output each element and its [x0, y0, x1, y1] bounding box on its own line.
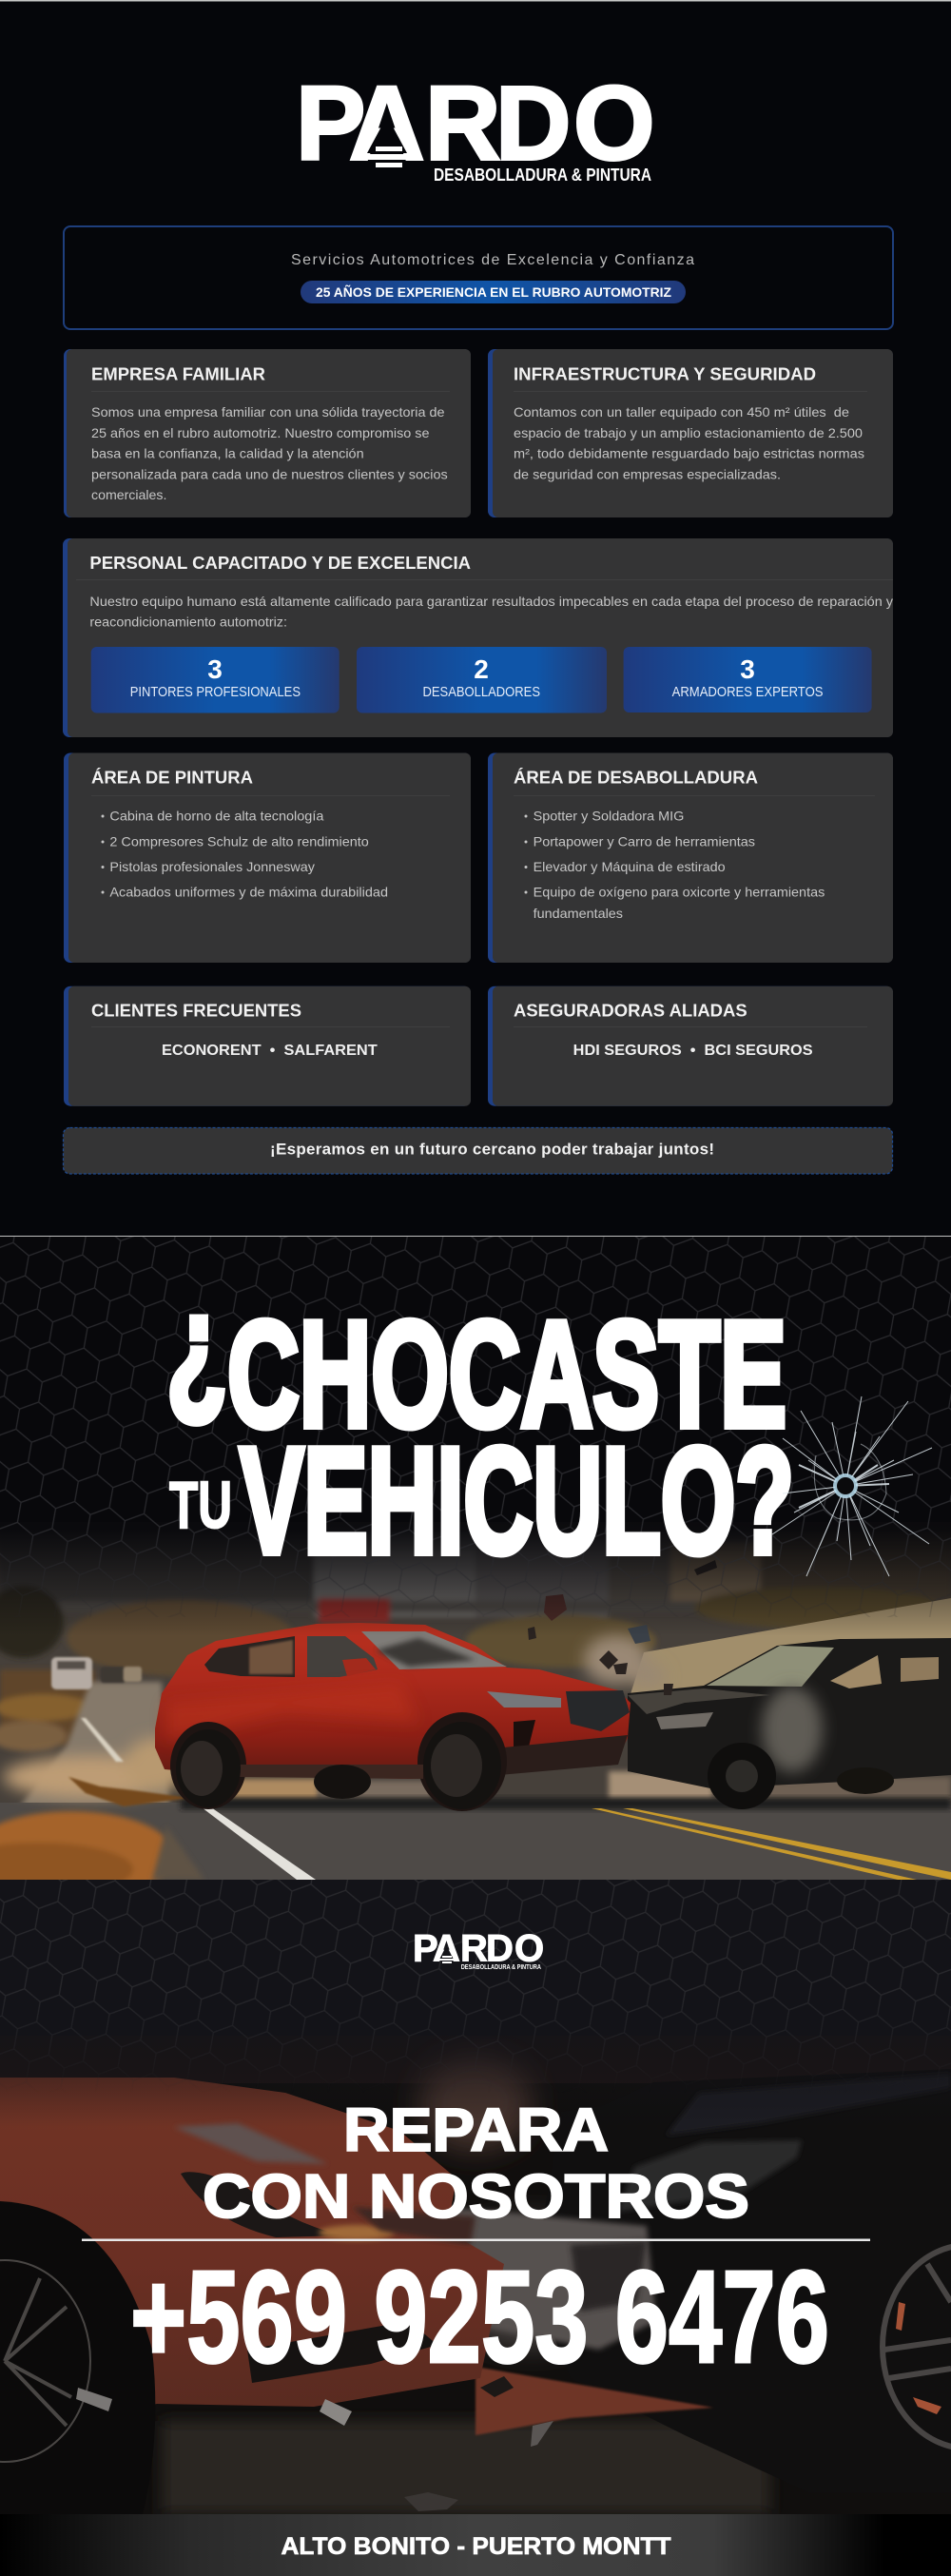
- body text: m², todo debidamente resguardado bajo estrictas normas: [514, 445, 864, 460]
- yellow lines: [592, 1808, 917, 1880]
- panel: aseguradoras aliadas: [488, 986, 893, 1106]
- heading: repara con nosotros: REPARA: [343, 2096, 609, 2164]
- headline: chocaste tu vehiculo: TU: [169, 1468, 232, 1542]
- headline: chocaste tu vehiculo: ¿: [166, 1262, 227, 1430]
- black car: [628, 1638, 951, 1809]
- footer band: location: ALTO BONITO - PUERTO MONTT: [281, 2533, 671, 2560]
- section: repair call to action: [0, 1880, 951, 2576]
- badge: 25 years: 25 AÑOS DE EXPERIENCIA EN EL RUBRO AUTOMOTRIZ: [316, 285, 671, 300]
- stat: pintores: 3: [207, 654, 223, 684]
- panel: closing message: ¡Esperamos en un futuro cercano poder trabajar juntos!: [270, 1140, 714, 1159]
- stat: armadores: 3: [740, 654, 755, 684]
- logo: small PARDO: PARDO: [413, 1927, 544, 1969]
- stat: pintores: PINTORES PROFESIONALES: [130, 684, 301, 700]
- body text: personalizada para cada uno de nuestros clientes y socios: [91, 466, 448, 481]
- body text: Somos una empresa familiar con una sólida trayectoria de: [91, 404, 445, 420]
- panel: area de desabolladura: [488, 753, 893, 963]
- panel: clientes frecuentes: [64, 986, 471, 1106]
- debris: [528, 1560, 717, 1695]
- panel: empresa familiar: [64, 349, 471, 517]
- grille: [566, 1690, 630, 1731]
- top fade: [0, 1484, 951, 1636]
- hexagon texture: [0, 1237, 951, 1617]
- headline: chocaste tu vehiculo: [166, 1262, 794, 1585]
- heading: ÁREA DE PINTURA: [91, 767, 253, 787]
- headlight: [181, 2172, 342, 2237]
- wheels: [314, 1765, 371, 1799]
- hexagon texture: [0, 1880, 951, 2055]
- body text: 25 años en el rubro automotriz. Nuestro compromiso se: [91, 425, 430, 440]
- equipment list: Acabados uniformes y de máxima durabilidad: [109, 885, 388, 900]
- body text: de seguridad con empresas especializadas.: [514, 466, 781, 481]
- photo: collision on road: [0, 1522, 951, 1899]
- panel: area de pintura: [64, 753, 471, 963]
- rim left: [0, 2260, 90, 2462]
- stat: armadores: ARMADORES EXPERTOS: [672, 684, 824, 700]
- body text: [89, 594, 893, 630]
- ground behind cars: [223, 1779, 319, 1800]
- logo: PARDO: DESABOLLADURA & PINTURA: [434, 166, 651, 185]
- heading: repara con nosotros: CON NOSOTROS: [203, 2161, 749, 2231]
- heading: repara con nosotros: [203, 2096, 749, 2231]
- badge: 25 years: [301, 281, 686, 303]
- body text: Nuestro equipo humano está altamente calificado para garantizar resultados impecables en cada etapa del proceso de reparación y: [89, 594, 893, 609]
- smoke: [405, 2055, 557, 2361]
- panel: infraestructura y seguridad: [488, 349, 893, 517]
- panel: intro banner: [64, 226, 893, 329]
- wheel arch left: [0, 2201, 156, 2462]
- heading: EMPRESA FAMILIAR: [91, 365, 265, 384]
- panel: personal capacitado: [63, 538, 893, 737]
- orange streak: [476, 2367, 713, 2435]
- body text: [91, 404, 448, 502]
- bush: [0, 1807, 165, 1880]
- insurer names: HDI SEGUROS • BCI SEGUROS: [573, 1043, 813, 1059]
- heading: ÁREA DE DESABOLLADURA: [514, 767, 758, 787]
- lane line: [202, 1807, 316, 1880]
- stat: armadores: [624, 647, 872, 712]
- rim right: [883, 2245, 951, 2449]
- equipment list: Elevador y Máquina de estirado: [534, 859, 726, 874]
- body text: comerciales.: [91, 487, 166, 502]
- body text: Contamos con un taller equipado con 450 m² útiles de: [514, 404, 849, 420]
- stat: desabolladores: [357, 647, 607, 713]
- retaining wall: [628, 1598, 951, 1703]
- lower grille: [247, 2321, 437, 2383]
- road shadow: [181, 1798, 951, 1809]
- dust cloud: [3, 1738, 189, 1798]
- footer band: location: [0, 2514, 951, 2576]
- burst dust: [584, 1635, 666, 1689]
- equipment list: Portapower y Carro de herramientas: [534, 833, 755, 849]
- wheel arches: [170, 1722, 246, 1809]
- equipment list: Cabina de horno de alta tecnología: [109, 809, 324, 824]
- far road: [19, 1682, 169, 1807]
- heading: ASEGURADORAS ALIADAS: [514, 1001, 747, 1020]
- client names: ECONORENT • SALFARENT: [162, 1043, 378, 1059]
- background scenery: [0, 1522, 951, 1751]
- equipment list: fundamentales: [534, 906, 623, 921]
- logo: PARDO: PARDO: [296, 65, 655, 183]
- body text: basa en la confianza, la calidad y la atención: [91, 445, 364, 460]
- stat: pintores: [91, 647, 340, 713]
- heading: PERSONAL CAPACITADO Y DE EXCELENCIA: [89, 554, 471, 573]
- body text: reacondicionamiento automotriz:: [89, 615, 287, 630]
- heading: INFRAESTRUCTURA Y SEGURIDAD: [514, 365, 816, 384]
- equipment list: [101, 809, 388, 900]
- photo: close-up collision: [0, 2036, 951, 2514]
- equipment list: Pistolas profesionales Jonnesway: [109, 859, 315, 874]
- equipment list: Spotter y Soldadora MIG: [534, 809, 684, 824]
- stat: desabolladores: DESABOLLADORES: [422, 684, 540, 700]
- far cars: [51, 1657, 142, 1689]
- ground: [162, 2421, 770, 2514]
- body text: [514, 404, 864, 481]
- black car: [546, 2078, 809, 2477]
- panel: closing message: [63, 1128, 892, 1174]
- body highlight: [166, 1684, 418, 1741]
- icon: shattered glass: [772, 1396, 932, 1576]
- equipment list: 2 Compresores Schulz de alto rendimiento: [109, 833, 369, 849]
- wreck centre: [447, 2207, 656, 2350]
- body text: espacio de trabajo y un amplio estacionamiento de 2.500: [514, 425, 863, 440]
- red car: [155, 1623, 631, 1811]
- stat: desabolladores: 2: [474, 654, 489, 684]
- section: crash poster: [0, 1237, 951, 1899]
- equipment list: Equipo de oxígeno para oxicorte y herramientas: [534, 885, 825, 900]
- logo: small PARDO: DESABOLLADURA & PINTURA: [461, 1964, 541, 1971]
- heading: CLIENTES FRECUENTES: [91, 1001, 301, 1020]
- tagline: Servicios Automotrices de Excelencia y Confianza: [291, 252, 694, 268]
- bottom fade over photo: [0, 1880, 951, 2127]
- equipment list: [525, 809, 825, 921]
- debris: [404, 2376, 553, 2511]
- red car: [0, 2078, 504, 2435]
